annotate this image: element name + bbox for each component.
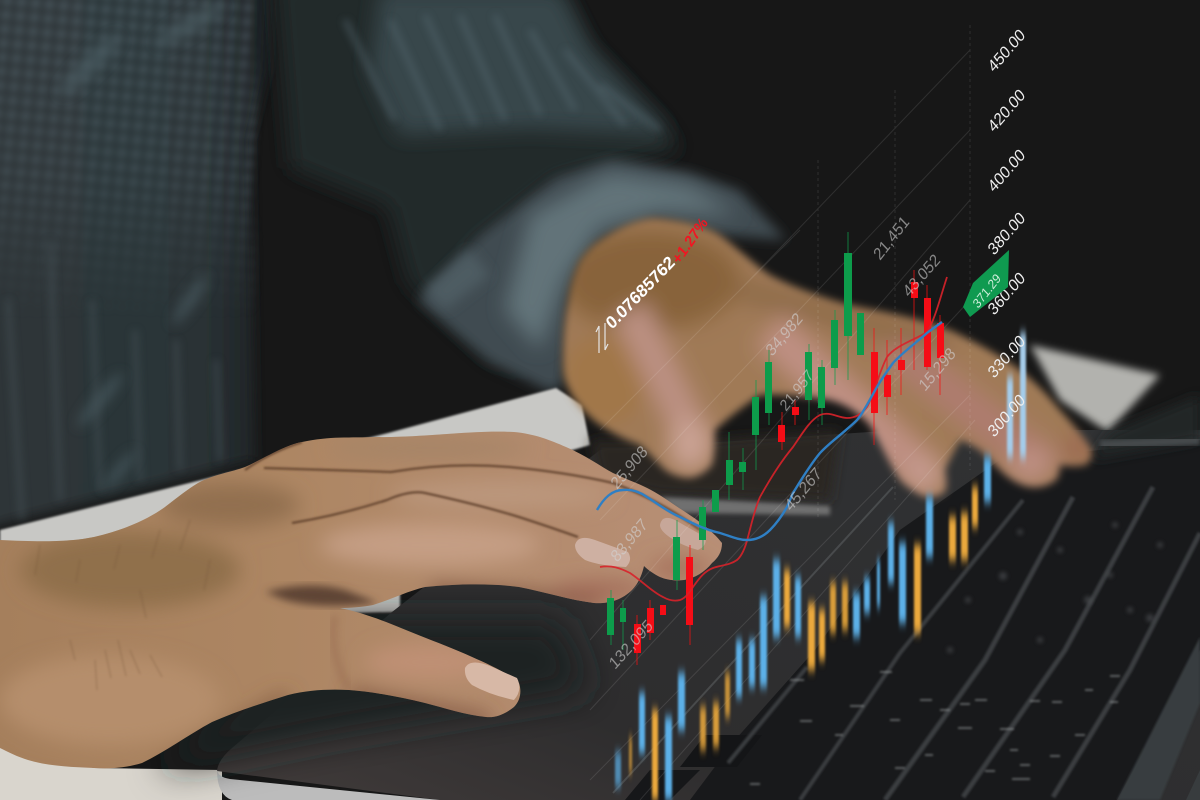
blue trend line (597, 322, 942, 540)
data labels: 132,095 (606, 616, 656, 673)
data labels: 83,987 (608, 515, 651, 566)
keyboard key legends (750, 672, 1120, 784)
data labels: 45,267 (782, 464, 825, 515)
data labels: 43,052 (900, 250, 944, 301)
laptop body (160, 430, 1200, 800)
ticker value: +1.27% (669, 214, 711, 268)
icon: up down arrows (596, 323, 608, 353)
chart grid lines (590, 25, 975, 800)
volume bars: blue (615, 333, 1026, 800)
price axis labels: 330.00 (985, 331, 1029, 382)
fingernail: middle (660, 518, 706, 550)
price axis labels: 300.00 (985, 390, 1029, 441)
data labels: 15,298 (916, 344, 959, 395)
candlesticks: green (607, 232, 864, 650)
palm crease (265, 585, 378, 606)
ticker value: 0.07685762 (602, 252, 678, 333)
data labels: 21,957 (777, 366, 817, 415)
hand shading (0, 440, 710, 772)
near hand (0, 432, 722, 772)
desk surface (0, 345, 1160, 800)
sweater cuff (418, 160, 786, 392)
data labels: 25,908 (608, 442, 651, 493)
price axis labels: 400.00 (985, 145, 1029, 196)
volume bars: orange (629, 487, 978, 800)
sweater torso (0, 0, 272, 532)
laptop right edge (1117, 637, 1200, 800)
data labels: 21,451 (870, 212, 913, 264)
price axis labels (985, 25, 1029, 441)
red trend line (600, 277, 947, 601)
current price tag: 371.29 (970, 271, 1004, 311)
far hand (558, 214, 1098, 502)
price axis labels: 380.00 (985, 208, 1029, 259)
fingernail: ring (575, 538, 630, 567)
finger creases (245, 442, 700, 537)
price axis labels: 420.00 (985, 85, 1029, 136)
data labels: 34,982 (763, 309, 806, 360)
price axis labels: 360.00 (985, 268, 1029, 319)
data labels (606, 212, 959, 673)
price axis labels: 450.00 (985, 25, 1029, 76)
candlesticks: red (634, 270, 944, 665)
hair texture (74, 652, 162, 688)
sweater sleeve (275, 0, 680, 392)
fingernail: thumb (465, 662, 519, 700)
keyboard key gaps (728, 487, 1200, 800)
current price tag (963, 250, 1009, 317)
ticker value (596, 214, 711, 353)
laptop keyboard (625, 395, 1200, 800)
